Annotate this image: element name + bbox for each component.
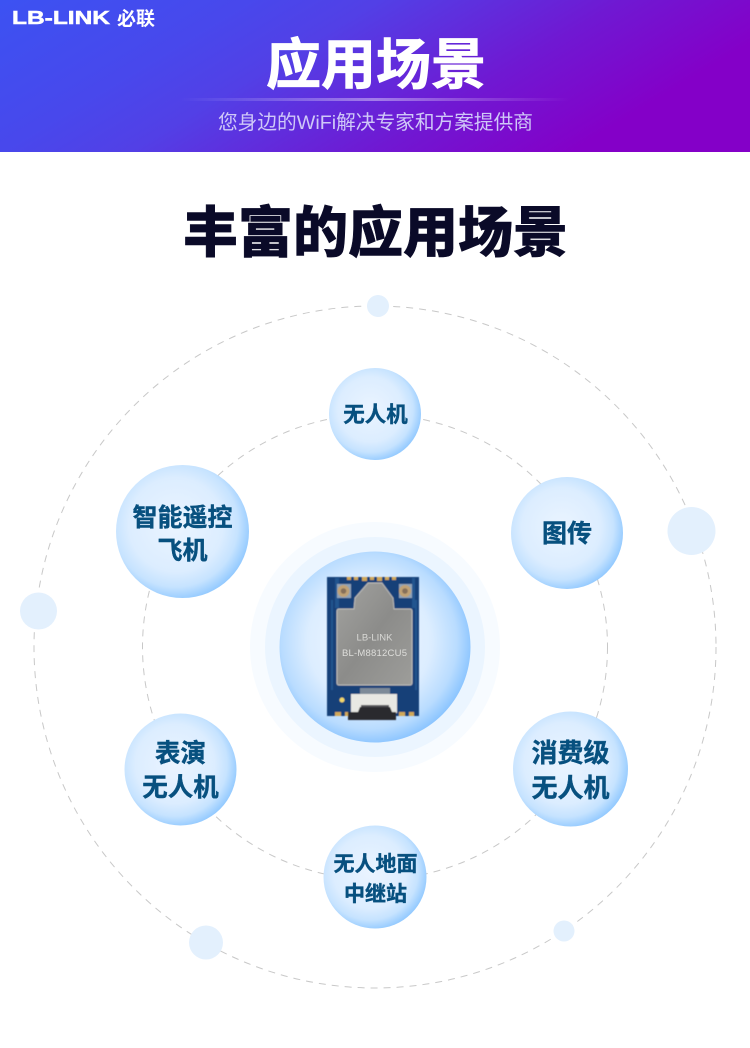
bubble: 无人地面中继站 <box>324 826 426 928</box>
bubble: 消费级无人机: 消费级 <box>531 738 610 768</box>
bubble: 表演无人机: 无人机 <box>142 774 219 802</box>
logo: 必联 <box>117 8 155 30</box>
central module hub <box>250 522 500 772</box>
bubble: 表演无人机: 表演 <box>155 740 206 768</box>
bubble: 智能遥控飞机 <box>116 465 249 598</box>
subtitle: 您身边的WiFi解决专家和方案提供商 <box>218 112 533 134</box>
module board: BL-M8812CU5 <box>342 648 407 659</box>
bubble: 智能遥控飞机: 智能遥控 <box>132 504 233 532</box>
bubble: 智能遥控飞机: 飞机 <box>157 537 208 565</box>
inner dashed orbit <box>142 414 608 880</box>
orbit dots <box>20 295 716 960</box>
bubble: 消费级无人机: 无人机 <box>531 773 610 803</box>
bubble: 图传 <box>511 477 623 589</box>
bubble: 无人机: 无人机 <box>343 403 408 427</box>
bubble: 消费级无人机 <box>513 712 628 826</box>
bubble: 无人地面中继站: 无人地面 <box>334 853 418 876</box>
section heading: 丰富的应用场景 <box>183 202 568 264</box>
bubble: 表演无人机 <box>124 714 236 826</box>
logo <box>12 8 155 30</box>
bubble: 无人地面中继站: 中继站 <box>344 882 407 906</box>
page title: 应用场景 <box>266 34 486 96</box>
outer dashed orbit <box>34 306 716 988</box>
module board <box>327 577 419 720</box>
logo: LB-LINK <box>12 8 110 28</box>
bubble: 无人机 <box>329 368 421 460</box>
header banner <box>0 0 750 152</box>
title underline <box>180 98 570 101</box>
bubble: 图传: 图传 <box>542 520 592 548</box>
module board: LB-LINK <box>357 632 393 644</box>
